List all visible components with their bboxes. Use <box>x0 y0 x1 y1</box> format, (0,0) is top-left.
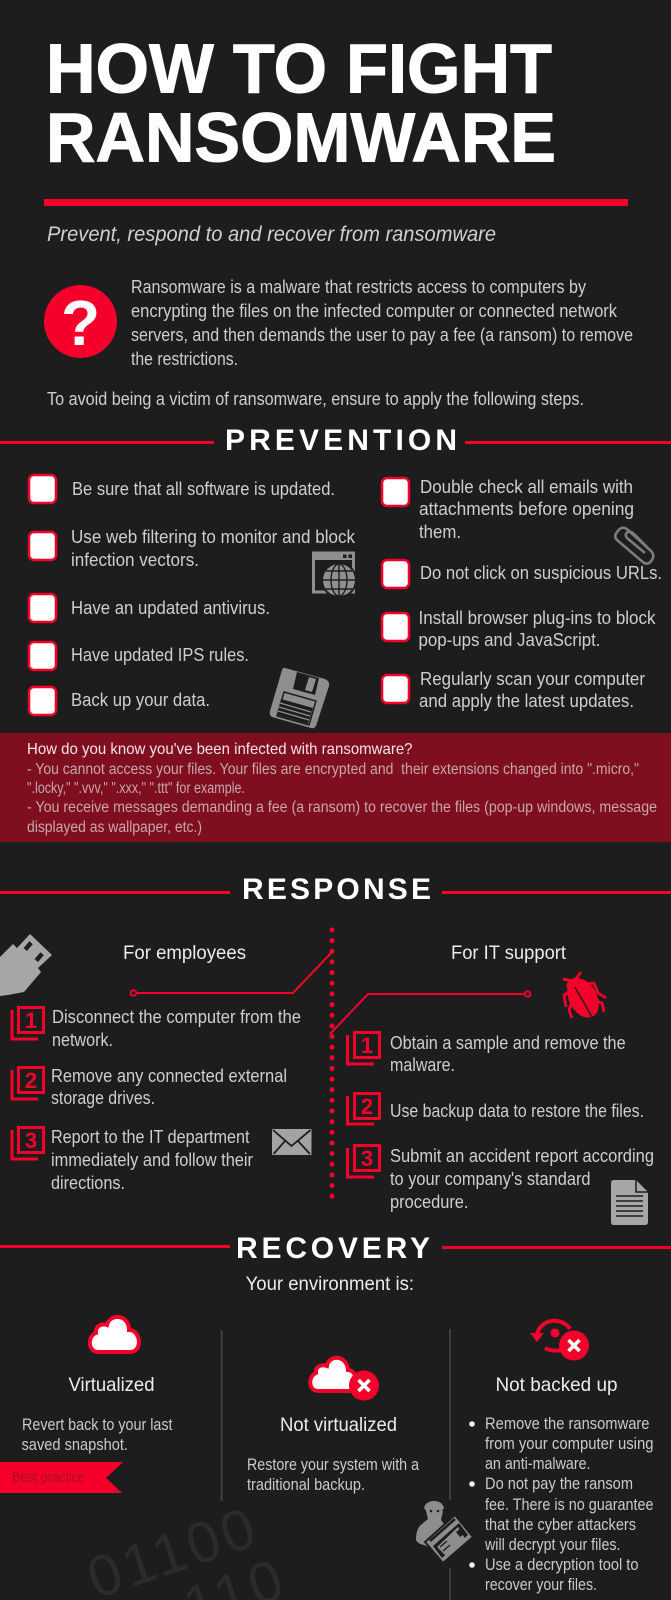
title <box>46 30 556 176</box>
checklist item: scan: Regularly scan your computer <box>420 669 645 689</box>
step 1 <box>348 1032 626 1075</box>
checklist item: plug-ins: Install browser plug-ins to block <box>418 608 656 628</box>
text: revert: saved snapshot. <box>22 1435 128 1454</box>
icon: bug <box>561 972 606 1023</box>
bullet list: Use a decryption tool to <box>485 1555 638 1574</box>
checklist item: web filtering <box>29 527 356 570</box>
connector line right <box>330 991 530 1034</box>
step 1: Obtain a sample and remove the <box>390 1033 626 1053</box>
step 1: 1 <box>25 1008 37 1033</box>
step 1: Disconnect the computer from the <box>52 1007 301 1027</box>
panel: prevention right column <box>382 477 662 711</box>
step 1: 1 <box>361 1033 373 1058</box>
checklist item: scan <box>382 669 645 711</box>
intro call to action: To avoid being a victim of ransomware, ensure to apply the following steps. <box>47 389 584 409</box>
checklist item: web filtering: Use web filtering to monitor and block <box>71 527 356 547</box>
checklist item: IPS rules: Have updated IPS rules. <box>71 645 249 665</box>
step 1: malware. <box>390 1055 455 1075</box>
panel: how do you know you've been infected: displayed as wallpaper, etc.) <box>27 819 202 836</box>
icon: document <box>611 1180 648 1225</box>
step 1 <box>12 1007 301 1050</box>
step 2: 2 <box>361 1094 373 1119</box>
checklist item: emails: Double check all emails with <box>420 477 633 497</box>
step 3: Report to the IT department <box>51 1127 250 1147</box>
subheading: not virtualized: Not virtualized <box>280 1414 397 1436</box>
checklist item: emails: attachments before opening <box>419 499 634 519</box>
checklist item: emails: them. <box>419 522 461 542</box>
checklist item: web filtering: infection vectors. <box>71 550 199 570</box>
step 3 <box>348 1146 654 1212</box>
heading: response <box>0 873 671 906</box>
checklist item: IPS rules <box>29 642 249 670</box>
panel: prevention left column <box>29 475 356 715</box>
step 3 <box>12 1127 253 1193</box>
ribbon: best practice <box>0 1462 123 1493</box>
panel: for employees <box>12 942 332 1193</box>
heading: response: RESPONSE <box>242 873 431 906</box>
checklist item: antivirus: Have an updated antivirus. <box>71 598 270 618</box>
subheading: not backed up: Not backed up <box>496 1374 618 1396</box>
icon: USB drive <box>0 934 52 996</box>
checklist item: backup: Back up your data. <box>71 690 210 710</box>
heading: prevention <box>0 424 671 457</box>
bullet list: will decrypt your files. <box>484 1535 620 1554</box>
intro paragraph: the restrictions. <box>131 349 238 369</box>
subheading: for employees: For employees <box>123 942 246 964</box>
ribbon: best practice: Best practice <box>12 1469 85 1486</box>
text: restore: traditional backup. <box>247 1475 365 1494</box>
panel: not backed up <box>469 1321 654 1594</box>
checklist item: scan: and apply the latest updates. <box>419 691 634 711</box>
dotted divider <box>330 930 334 1197</box>
bullet list: that the cyber attackers <box>485 1515 636 1534</box>
step 2 <box>348 1094 644 1124</box>
panel: how do you know you've been infected: How do you know you've been infected with ransomware? <box>27 741 413 758</box>
icon: floppy disk <box>270 668 329 728</box>
step 3: to your company's standard <box>390 1169 590 1189</box>
icon: cloud with x <box>310 1358 379 1400</box>
subheading: for IT support: For IT support <box>451 942 567 964</box>
icon: envelope <box>272 1129 312 1155</box>
step 2 <box>12 1066 287 1108</box>
heading: recovery: RECOVERY <box>236 1232 430 1265</box>
intro paragraph <box>131 277 633 369</box>
column dividers <box>222 1329 450 1600</box>
checklist item: antivirus <box>29 594 270 622</box>
step 1: network. <box>52 1030 113 1050</box>
icon: web browser globe <box>313 553 357 598</box>
checklist item: plug-ins: pop-ups and JavaScript. <box>418 630 600 650</box>
step 2: storage drives. <box>51 1088 155 1108</box>
subtitle: Prevent, respond to and recover from ransomware <box>47 223 496 246</box>
step 3: Submit an accident report according <box>390 1146 654 1166</box>
bullet list <box>469 1414 654 1594</box>
heading: prevention: PREVENTION <box>225 424 457 457</box>
text: restore <box>247 1455 419 1494</box>
checklist item: emails <box>382 477 634 542</box>
step 2: Remove any connected external <box>51 1066 287 1086</box>
step 3: 3 <box>361 1146 373 1171</box>
text: restore: Restore your system with a <box>247 1455 419 1474</box>
step 3: 3 <box>25 1128 37 1153</box>
icon: question mark <box>44 285 117 359</box>
title underline <box>44 199 628 206</box>
step 2: Use backup data to restore the files. <box>390 1101 644 1121</box>
text: revert <box>22 1415 173 1454</box>
subheading: virtualized: Virtualized <box>68 1374 154 1396</box>
bullet list: an anti-malware. <box>485 1454 590 1473</box>
bullet list: Do not pay the ransom <box>485 1474 633 1493</box>
intro paragraph: encrypting the files on the infected computer or connected network <box>131 301 618 321</box>
connector line left <box>131 952 332 996</box>
step 3: immediately and follow their <box>51 1150 253 1170</box>
panel: how do you know you've been infected <box>0 733 671 842</box>
icon: restore with x <box>530 1321 589 1360</box>
icon: thief with card <box>416 1501 473 1563</box>
icon: cloud <box>90 1317 139 1352</box>
panel: how do you know you've been infected: ".locky," ".vvv," ".xxx," ".ttt" for example. <box>27 780 245 797</box>
icon: paperclip <box>615 528 653 564</box>
bullet list: Remove the ransomware <box>485 1414 650 1433</box>
bullet list: recover your files. <box>485 1575 597 1594</box>
title: HOW TO FIGHT <box>46 30 552 108</box>
panel: virtualized <box>0 1317 173 1493</box>
checklist item: URLs <box>382 560 662 588</box>
intro paragraph: Ransomware is a malware that restricts access to computers by <box>131 277 586 297</box>
panel: for IT support <box>330 942 654 1212</box>
icon: question mark: ? <box>61 287 100 359</box>
step 2: 2 <box>25 1068 37 1093</box>
step 3: directions. <box>51 1173 125 1193</box>
title: RANSOMWARE <box>46 98 556 176</box>
checklist item: backup <box>29 687 210 715</box>
panel: not virtualized <box>247 1358 419 1494</box>
text: revert: Revert back to your last <box>22 1415 173 1434</box>
step 3: procedure. <box>390 1192 468 1212</box>
heading: recovery <box>0 1232 671 1265</box>
checklist item: software: Be sure that all software is updated. <box>72 479 335 499</box>
checklist item: plug-ins <box>382 608 656 650</box>
checklist item: software <box>29 475 335 503</box>
text: your environment is: Your environment is: <box>246 1273 414 1295</box>
